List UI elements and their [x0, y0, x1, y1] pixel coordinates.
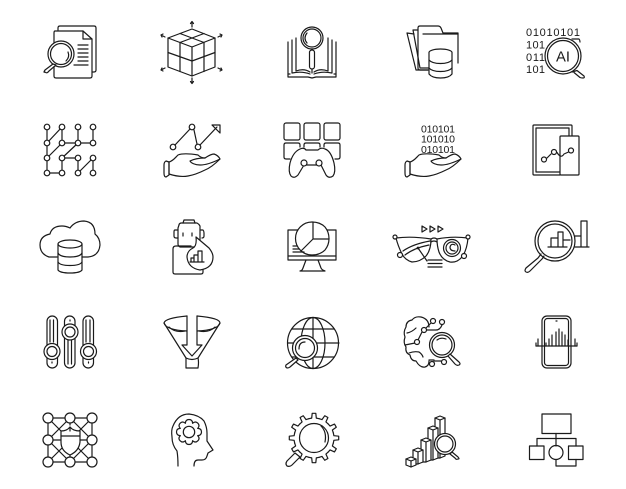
- icon: game controller keys: [284, 123, 340, 177]
- icon: tablet line chart: [533, 125, 579, 175]
- binary text: 01010101: [526, 27, 580, 39]
- icon: smart glasses: [393, 226, 470, 267]
- icon: globe search: [286, 318, 339, 368]
- icon: phone sound wave: [536, 316, 577, 368]
- icon: hand with binary data: 010101: [421, 144, 455, 156]
- icon: hand with binary data: 101010: [421, 134, 455, 146]
- icon: hand with growth chart: [164, 124, 220, 177]
- icon: data cube: [161, 22, 222, 84]
- icon: neural network shield: [43, 413, 97, 467]
- icon: AI binary search: [526, 27, 584, 78]
- icon: head with gear: [172, 414, 213, 466]
- icon: data funnel: [164, 316, 220, 368]
- icon: AI binary search: 101: [526, 40, 545, 52]
- icon: 3D bars search: [406, 416, 459, 467]
- binary text: 010101: [421, 124, 455, 136]
- icon: AI binary search: 011: [526, 52, 545, 64]
- icon: monitor pie chart: [288, 222, 336, 271]
- icon: folder database: [407, 26, 458, 78]
- icon: cloud database: [40, 221, 100, 273]
- icon: gear search: [286, 413, 339, 466]
- icon: sliders: [44, 316, 96, 368]
- icon: magnifier bar chart: [525, 221, 589, 272]
- icon: AI binary search: 101: [526, 64, 545, 76]
- icon: circuit nodes: [44, 124, 96, 176]
- icon: document search: [44, 26, 96, 78]
- icon: robot analytics: [173, 220, 213, 274]
- icon: AI binary search: AI: [556, 48, 570, 66]
- icon: brain search: [404, 317, 460, 367]
- icon: hand with binary data: [405, 124, 461, 177]
- icon: flowchart: [530, 414, 583, 466]
- icon: book search: [288, 27, 336, 78]
